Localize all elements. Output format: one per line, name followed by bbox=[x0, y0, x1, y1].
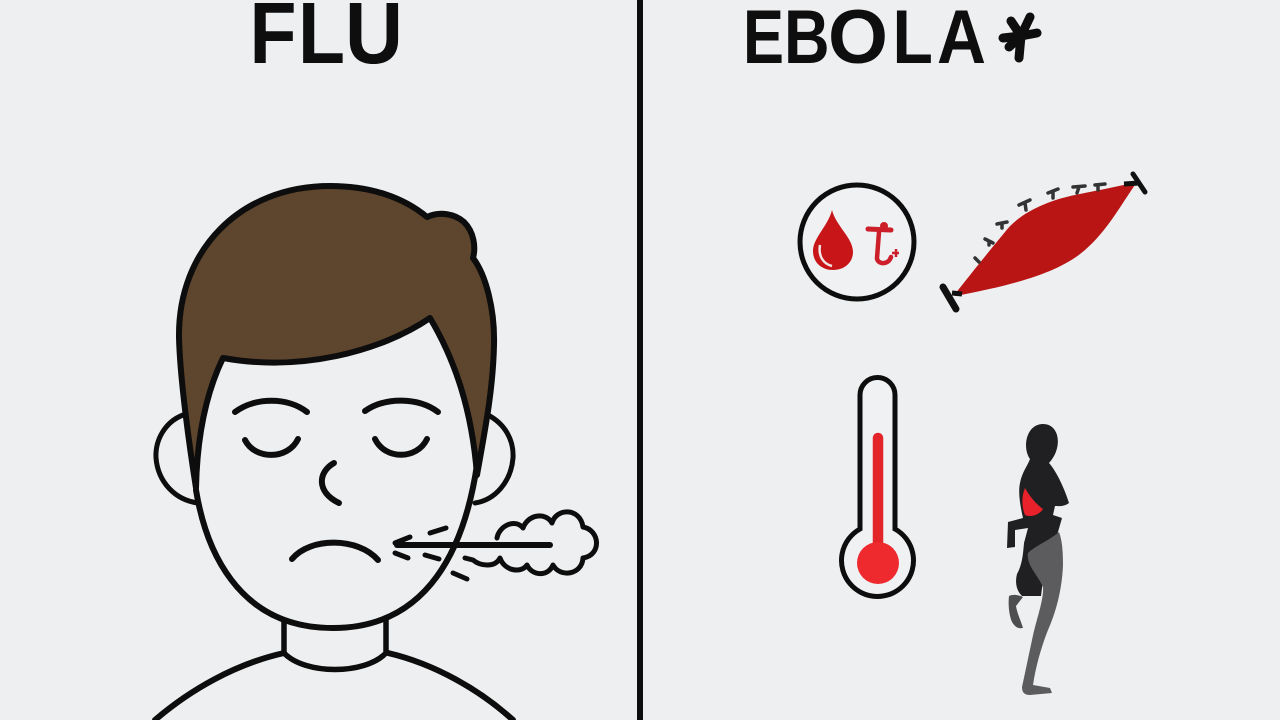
neck bbox=[284, 618, 386, 670]
icon: virus glyph bbox=[1003, 17, 1037, 58]
right ear bbox=[475, 415, 513, 503]
face bbox=[196, 465, 477, 628]
left brow bbox=[235, 401, 307, 412]
body shoulders bbox=[155, 653, 513, 720]
hair bbox=[179, 186, 494, 488]
front leg bbox=[1022, 532, 1063, 695]
icon: thermometer bbox=[841, 378, 914, 596]
panel: flu person bbox=[155, 186, 513, 720]
head and torso bbox=[1007, 424, 1069, 596]
nose bbox=[322, 463, 339, 503]
mouth bbox=[292, 543, 378, 560]
heading: EBOLA bbox=[743, 0, 986, 80]
right closed eye bbox=[375, 439, 427, 455]
icon: cough cloud and breath lines bbox=[395, 512, 597, 579]
red organ bbox=[1022, 488, 1043, 516]
central divider bbox=[637, 0, 643, 720]
heading: FLU bbox=[250, 0, 403, 82]
panel: ebola symptoms bbox=[800, 174, 1145, 695]
back foot bbox=[1009, 595, 1023, 628]
icon: muscle bbox=[943, 174, 1145, 309]
icon: blood circle bbox=[800, 185, 914, 299]
icon: human figure with highlighted organ bbox=[1007, 424, 1069, 695]
right brow bbox=[365, 401, 438, 412]
red symbol bbox=[868, 229, 891, 230]
left closed eye bbox=[245, 439, 298, 455]
blood drop bbox=[813, 210, 853, 270]
left ear bbox=[156, 415, 198, 503]
